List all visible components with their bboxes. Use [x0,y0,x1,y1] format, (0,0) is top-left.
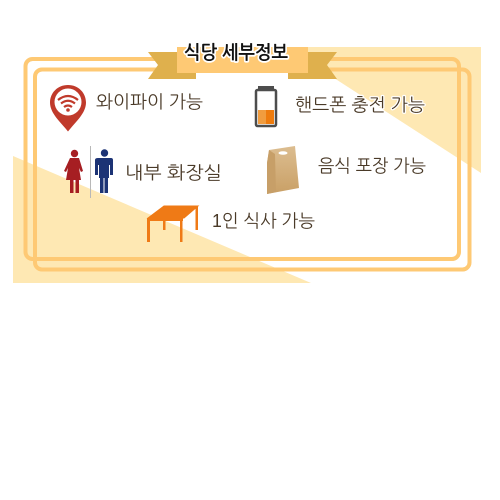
panel: double rounded frame [26,59,470,270]
label: restroom: 내부 화장실 [125,163,222,183]
label: phone charging: 핸드폰 충전 가능 [295,95,425,115]
ribbon left tail [148,52,196,79]
background triangle: top right [286,47,481,173]
woman [64,150,83,193]
divider [90,146,91,198]
icon: restroom [64,146,113,198]
panel: frame shadow [26,60,470,271]
label: food packaging: 음식 포장 가능 [318,156,426,176]
icon: paper bag [267,146,299,194]
icon: phone battery [256,86,276,126]
label: wifi: 와이파이 가능 [96,92,203,112]
ribbon centre [177,47,308,73]
man [95,149,113,193]
ribbon right tail [288,52,337,79]
background triangle: bottom left [13,156,311,283]
icon: table [147,206,198,242]
label: solo dining: 1인 식사 가능 [212,211,315,231]
ribbon banner [148,43,337,79]
title: 식당 세부정보 [184,43,288,64]
icon: wifi location pin [50,85,86,132]
